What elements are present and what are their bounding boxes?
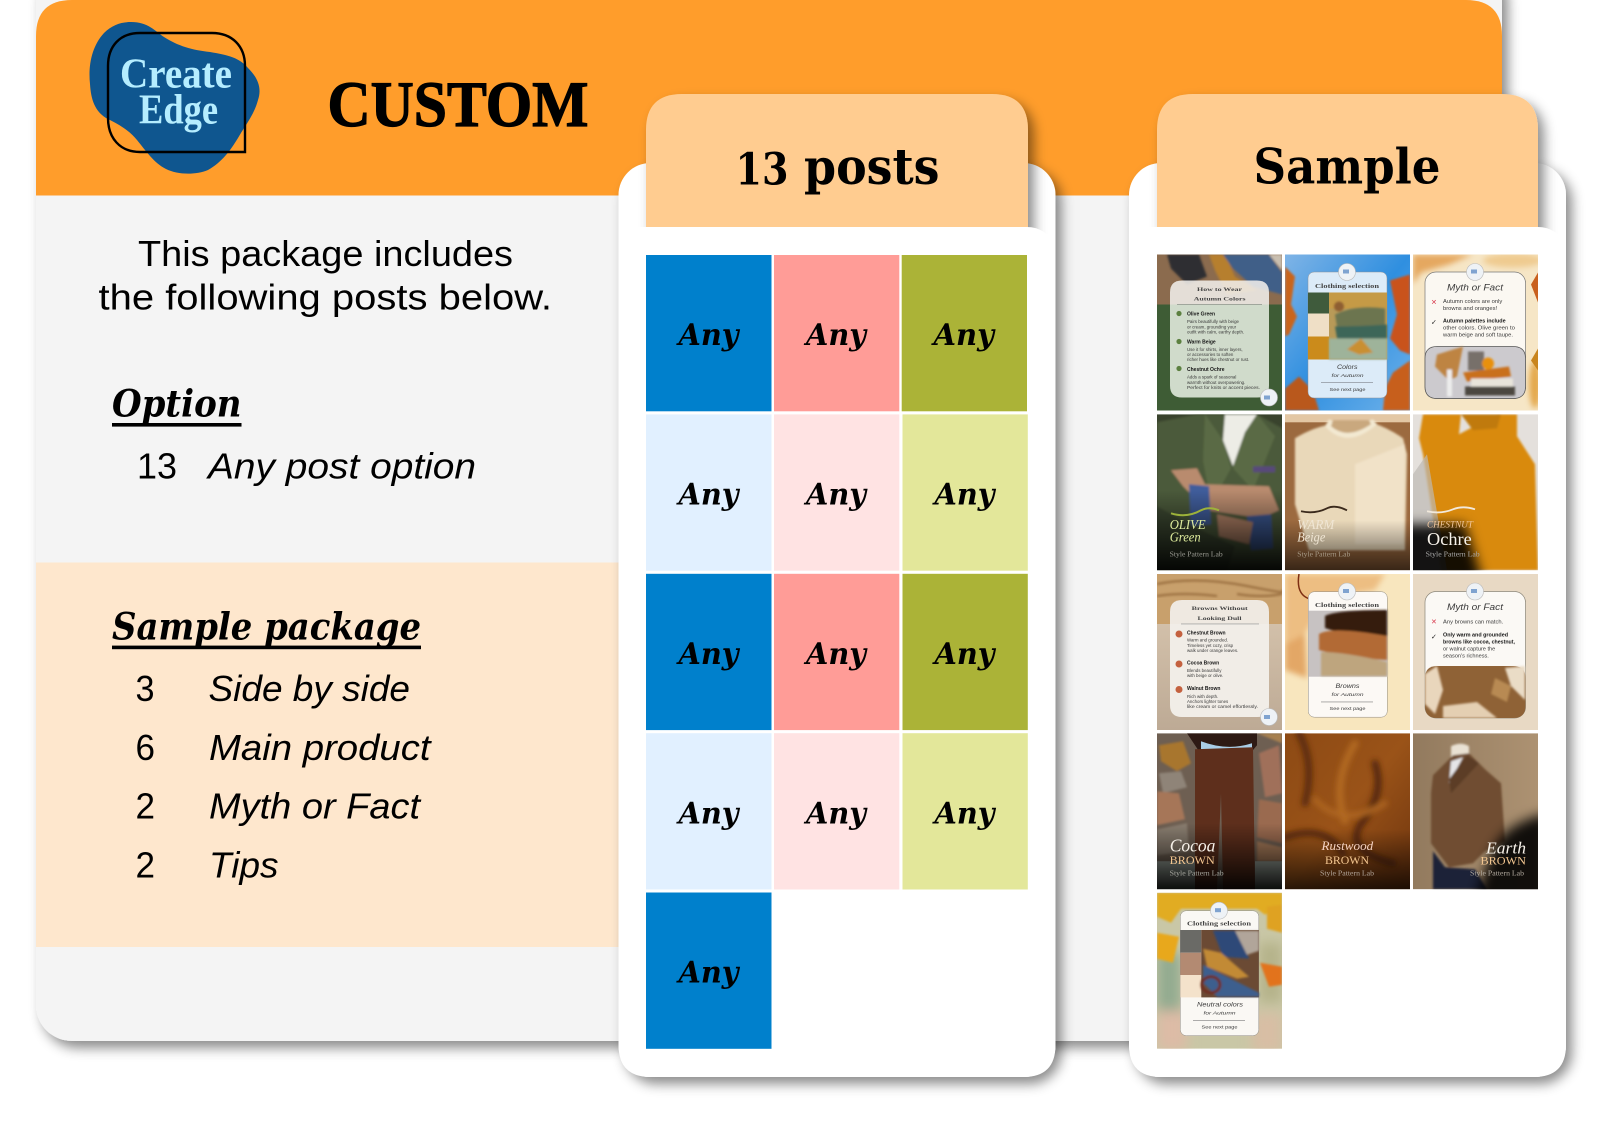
- post row 1: Any: [676, 318, 741, 353]
- sample tile: How to Wear Autumn Colors: Pairs beautifully with beige: [1187, 319, 1240, 324]
- sample tile: Browns Without Looking Dull: [1157, 574, 1282, 730]
- sample tile: Myth or Fact autumn palettes: [1413, 254, 1538, 410]
- sample tile: Myth or Fact browns: Any browns can match.: [1443, 619, 1504, 625]
- sample tile: Warm Beige: Beige: [1297, 531, 1325, 546]
- sample tile: Browns for Autumn: Clothing selection: [1315, 602, 1380, 609]
- sample tile: How to Wear Autumn Colors: warmth without overpowering.: [1187, 380, 1245, 385]
- sample tile: Browns Without Looking Dull: Anchors lighter tones: [1187, 699, 1229, 704]
- tab heading: 13 posts: posts: [804, 137, 940, 196]
- post row 3: Any: [932, 637, 997, 672]
- sample tile: Browns Without Looking Dull: Cocoa Brown: [1187, 660, 1219, 666]
- sample tile: Myth or Fact autumn palettes: Myth or Fact: [1447, 282, 1504, 292]
- sample tile: Colors for Autumn: Colors: [1337, 364, 1358, 371]
- sample tile: Myth or Fact browns: [1413, 574, 1538, 730]
- sample tile: Myth or Fact autumn palettes: ✕: [1431, 300, 1437, 306]
- sample package list: Main product: [209, 727, 433, 768]
- option row: 13: [137, 446, 177, 486]
- sample tile: Chestnut Ochre: [1413, 414, 1538, 570]
- sample tile: Myth or Fact browns: ✓: [1431, 633, 1437, 641]
- sample tile: Colors for Autumn: for Autumn: [1332, 373, 1364, 379]
- post row 1: Any: [803, 318, 868, 353]
- sample tile: Warm Beige: Style Pattern Lab: [1297, 550, 1351, 558]
- heading: Sample package: Sample package: [112, 604, 421, 648]
- sample tile: Colors for Autumn: [1285, 254, 1410, 410]
- post row 4: Any: [932, 796, 997, 831]
- sample package list: 2: [136, 844, 155, 886]
- sample tile: Myth or Fact browns: or walnut capture the: [1443, 646, 1495, 652]
- sample package band: [36, 562, 636, 947]
- post row 2: Any: [676, 477, 741, 512]
- sample tile: Cocoa Brown: BROWN: [1170, 853, 1215, 867]
- post row 5: [646, 892, 772, 1049]
- sample tile: Browns Without Looking Dull: Chestnut Brown: [1187, 631, 1226, 637]
- post row 3: Any: [676, 637, 741, 672]
- tab: 13 posts: [646, 94, 1028, 240]
- sample package list: Myth or Fact: [209, 786, 422, 826]
- sample tile: How to Wear Autumn Colors: or accessories to soften: [1187, 352, 1234, 357]
- sample tile: Earth Brown: [1413, 733, 1538, 890]
- tab heading: 13 posts: [736, 137, 940, 196]
- sample tile: Myth or Fact autumn palettes: warm beige and soft taupe.: [1442, 332, 1513, 338]
- post row 2: Any: [803, 477, 868, 512]
- post row 2: [646, 414, 1028, 571]
- sample tile: Cocoa Brown: [1157, 733, 1282, 890]
- sample tile: Rustwood Brown: Rustwood: [1320, 838, 1374, 853]
- logo wordmark: [120, 52, 232, 134]
- sample tile: How to Wear Autumn Colors: outfit with calm, earthy depth.: [1187, 330, 1244, 334]
- sample tile: Myth or Fact browns: browns like cocoa, chestnut,: [1443, 640, 1515, 646]
- header band: [36, 0, 1502, 196]
- sample tile: Browns Without Looking Dull: Browns Without: [1192, 606, 1248, 612]
- sample package list: 3: [136, 668, 154, 709]
- sample tile: How to Wear Autumn Colors: Olive Green: [1187, 312, 1215, 318]
- sample tile: How to Wear Autumn Colors: richer hues like chestnut or rust.: [1187, 357, 1249, 362]
- heading: Option: Option: [112, 382, 242, 426]
- sample tile: Olive Green: [1157, 414, 1282, 570]
- logo wordmark: Create: [120, 52, 232, 98]
- sample tile: Colors for Autumn: See next page: [1330, 387, 1366, 392]
- intro text: [98, 233, 552, 318]
- sample tile: Browns for Autumn: See next page: [1330, 706, 1366, 711]
- post row 4: [646, 733, 1028, 890]
- sample package list: 2: [136, 786, 155, 826]
- post grid: [646, 255, 1028, 1049]
- sample tile: Browns Without Looking Dull: Blends beautifully: [1187, 668, 1222, 673]
- sample tile: Browns Without Looking Dull: Warm and grounded.: [1187, 638, 1228, 642]
- logo frame: [108, 33, 245, 152]
- sample tile: Browns Without Looking Dull: Rich with depth.: [1187, 694, 1218, 699]
- post row 2: Any: [932, 477, 997, 512]
- sample tile: Olive Green: OLIVE: [1170, 518, 1206, 533]
- sample tile: How to Wear Autumn Colors: Perfect for knits or accent pieces.: [1187, 385, 1260, 390]
- post row 1: [646, 255, 1027, 411]
- post row 4: Any: [676, 796, 741, 831]
- sample tile: Myth or Fact autumn palettes: Autumn colors are only: [1443, 299, 1502, 305]
- logo: Create Edge: [90, 22, 260, 174]
- sample tile: Browns Without Looking Dull: like cream or camel effortlessly.: [1187, 704, 1258, 709]
- sample tile: Myth or Fact autumn palettes: other colors. Olive green to: [1443, 326, 1515, 332]
- tab: Sample: [1157, 94, 1538, 240]
- sample tile: Browns for Autumn: Browns: [1336, 684, 1360, 690]
- option row: Any post option: [206, 446, 476, 486]
- sample tile: Myth or Fact browns: Only warm and grounded: [1443, 632, 1508, 638]
- sample tile: Browns Without Looking Dull: walk under orange leaves.: [1187, 648, 1238, 653]
- sample package list: [136, 668, 433, 886]
- post row 3: [646, 574, 1028, 730]
- logo wordmark: Edge: [139, 88, 218, 134]
- tab heading: Sample: Sample: [1254, 138, 1440, 196]
- sample tile: Myth or Fact browns: ✕: [1431, 619, 1437, 626]
- sample tile: Warm Beige: [1285, 414, 1410, 570]
- sample tile: Myth or Fact autumn palettes: ✓: [1431, 318, 1437, 326]
- sample tile: How to Wear Autumn Colors: Adds a spark of seasonal: [1187, 374, 1236, 380]
- sample tile: Warm Beige: WARM: [1297, 518, 1336, 533]
- sample tile: Cocoa Brown: Style Pattern Lab: [1170, 869, 1224, 877]
- sample tile: Olive Green: Green: [1170, 531, 1201, 546]
- sample tile: How to Wear Autumn Colors: Use it for shirts, inner layers,: [1187, 347, 1243, 352]
- tab heading: 13 posts: 13: [736, 144, 788, 196]
- title: CUSTOM: CUSTOM: [328, 69, 588, 141]
- sample tile: How to Wear Autumn Colors: or cream, grounding your: [1187, 324, 1237, 330]
- sample tile: Myth or Fact autumn palettes: Autumn palettes include: [1443, 318, 1506, 324]
- sample tile: How to Wear Autumn Colors: [1157, 254, 1282, 410]
- sample tile: Neutral colors for Autumn: for Autumn: [1204, 1010, 1236, 1016]
- sample tile: Neutral colors for Autumn: Clothing selection: [1187, 921, 1252, 928]
- sample tile: Earth Brown: Earth: [1485, 838, 1526, 857]
- panel front sheet: [1129, 227, 1566, 1077]
- sample package list: Tips: [209, 844, 278, 886]
- sample tile: Browns Without Looking Dull: Timeless yet cozy, crisp: [1187, 643, 1234, 648]
- sample tile: Chestnut Ochre: Style Pattern Lab: [1426, 550, 1480, 558]
- sample tile: Cocoa Brown: Cocoa: [1170, 836, 1215, 856]
- sample tile: Myth or Fact browns: season's richness.: [1443, 654, 1489, 660]
- sample tile: Chestnut Ochre: Ochre: [1427, 529, 1472, 549]
- sample tile: How to Wear Autumn Colors: Autumn Colors: [1194, 296, 1247, 302]
- sample tile: Chestnut Ochre: CHESTNUT: [1427, 519, 1474, 529]
- sample tile: Rustwood Brown: [1285, 733, 1410, 890]
- sample tile: Browns for Autumn: [1285, 574, 1410, 730]
- intro text: the following posts below.: [98, 276, 552, 318]
- sample package list: Side by side: [208, 668, 410, 709]
- sample tile: Neutral colors for Autumn: See next page: [1202, 1025, 1238, 1030]
- post row 3: Any: [803, 637, 868, 672]
- panel: 13 posts: [618, 94, 1056, 1077]
- sample tile: Olive Green: Style Pattern Lab: [1170, 550, 1223, 558]
- sample tile: Browns Without Looking Dull: with beige or olive.: [1187, 673, 1223, 678]
- sample tile: Rustwood Brown: BROWN: [1325, 853, 1369, 867]
- panel front sheet: [618, 227, 1056, 1077]
- sample tile: Colors for Autumn: Clothing selection: [1315, 283, 1380, 290]
- sample tile: Earth Brown: Style Pattern Lab: [1470, 869, 1525, 877]
- sample tile: How to Wear Autumn Colors: Chestnut Ochre: [1187, 367, 1225, 373]
- sample tile: Earth Brown: BROWN: [1480, 853, 1526, 867]
- sample tile: Neutral colors for Autumn: [1157, 892, 1282, 1049]
- post row 1: Any: [931, 318, 996, 353]
- sample tile: Rustwood Brown: Style Pattern Lab: [1320, 869, 1375, 877]
- sample tile: Browns Without Looking Dull: Looking Dull: [1198, 616, 1242, 622]
- sample tile: How to Wear Autumn Colors: How to Wear: [1197, 287, 1243, 293]
- post row 5: Any: [676, 956, 741, 991]
- sample tile: Myth or Fact autumn palettes: browns and oranges!: [1443, 306, 1498, 312]
- sample tile: Myth or Fact browns: Myth or Fact: [1447, 602, 1504, 612]
- sample tile: Browns Without Looking Dull: Walnut Brown: [1187, 686, 1220, 692]
- post row 4: Any: [803, 796, 868, 831]
- sample tile: How to Wear Autumn Colors: Warm Beige: [1187, 340, 1216, 346]
- intro text: This package includes: [138, 233, 513, 274]
- sample package list: 6: [136, 727, 155, 768]
- sample tile: Browns for Autumn: for Autumn: [1332, 692, 1364, 698]
- sample tile: Neutral colors for Autumn: Neutral colors: [1197, 1003, 1243, 1009]
- panel: Sample: [1129, 94, 1566, 1077]
